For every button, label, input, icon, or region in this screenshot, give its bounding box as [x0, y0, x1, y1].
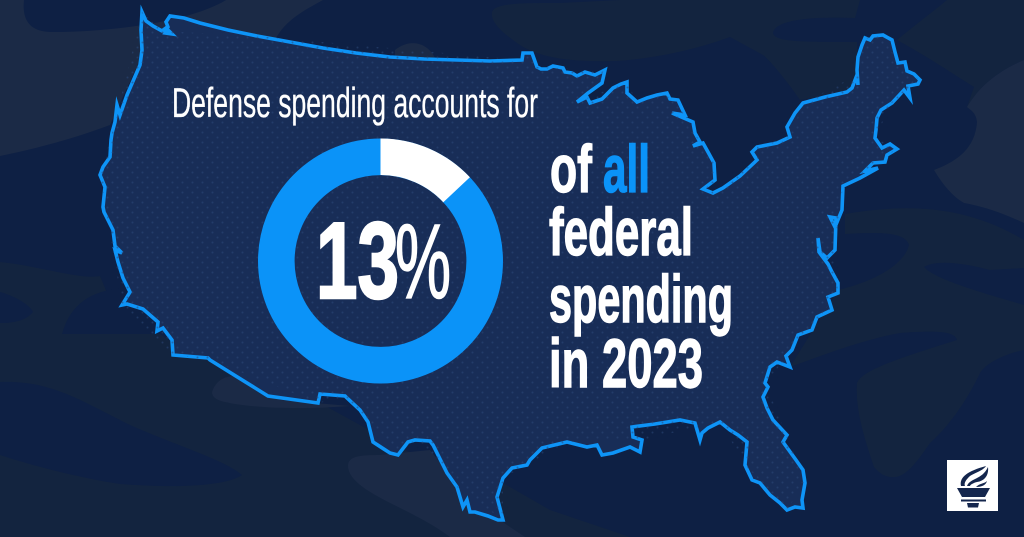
US map outline: [100, 12, 920, 520]
logo: torch: [947, 460, 998, 511]
donut chart: 13 percent: [276, 138, 485, 365]
statement: of all federal spending in 2023: [549, 132, 733, 402]
statement: of all federal spending in 2023: all: [603, 132, 650, 207]
donut value: %: [395, 203, 451, 321]
heading: defense spending: Defense spending accounts for: [172, 79, 538, 126]
statement: of all federal spending in 2023: in 2023: [549, 325, 703, 402]
donut value: 13: [316, 200, 399, 322]
statement: of all federal spending in 2023: spending: [549, 262, 733, 337]
statement: of all federal spending in 2023: of: [550, 132, 592, 207]
statement: of all federal spending in 2023: federal: [549, 195, 693, 270]
